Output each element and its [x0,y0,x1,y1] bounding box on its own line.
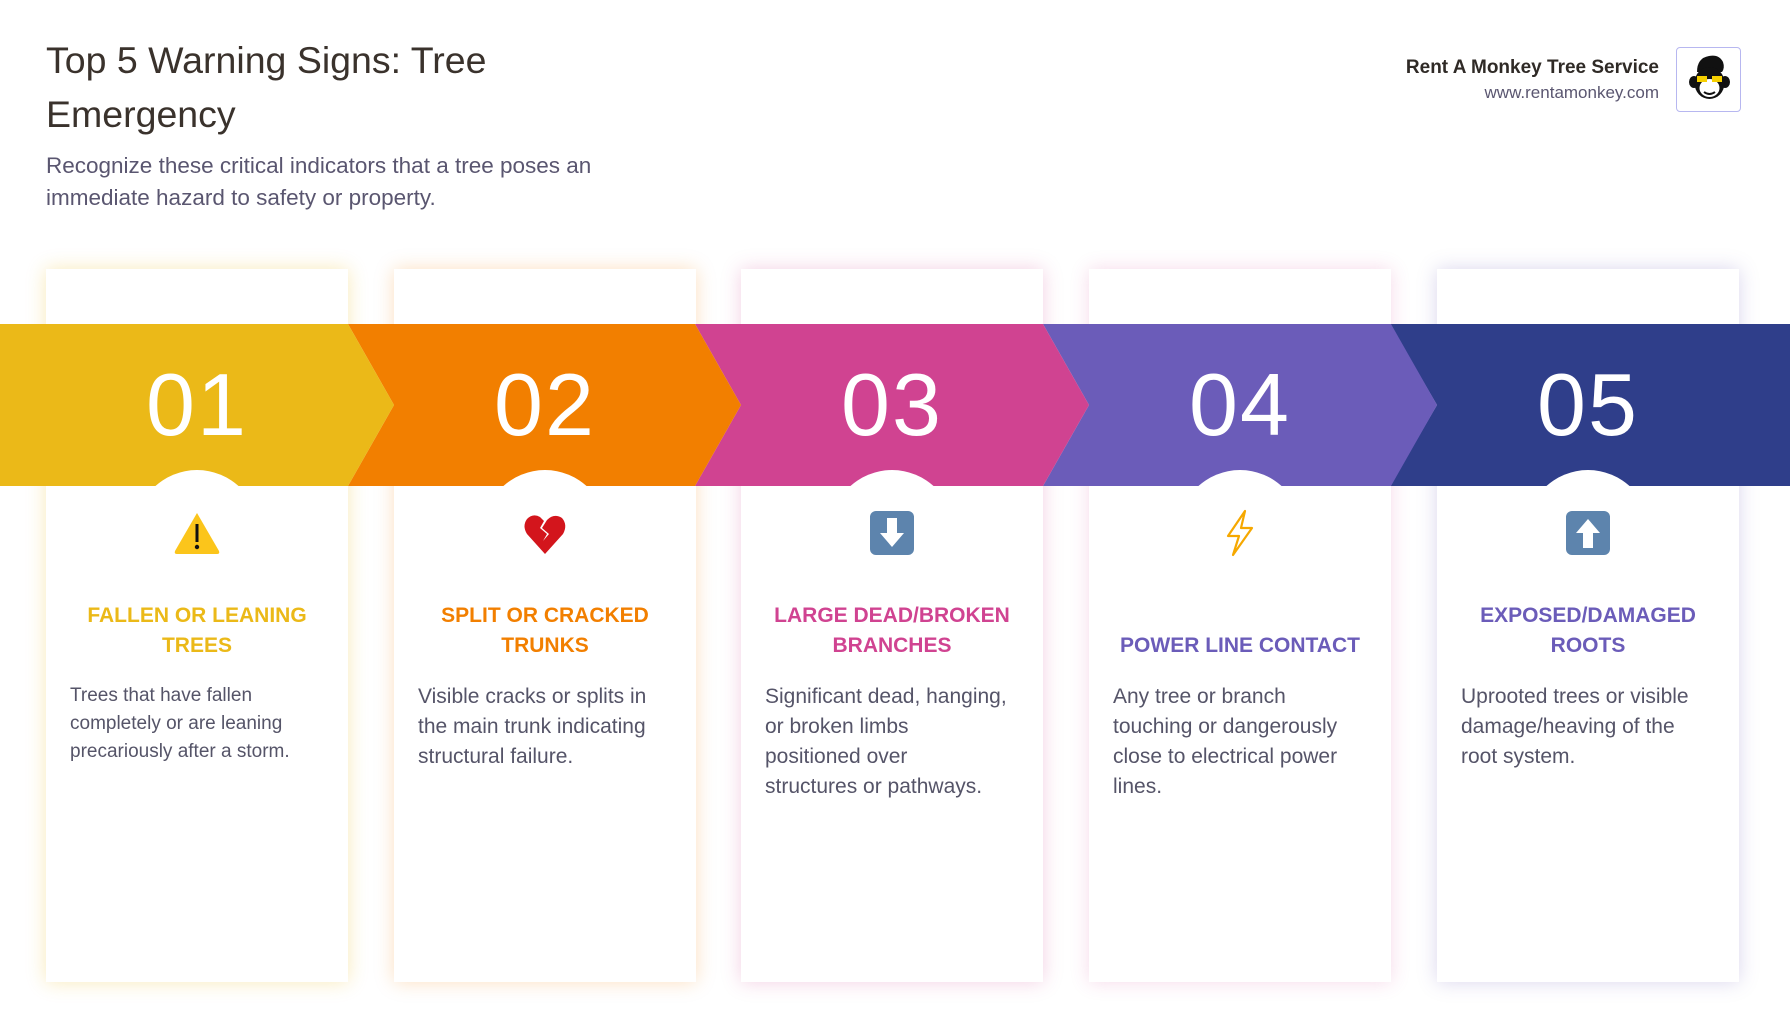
description 2: structural failure. [418,745,573,768]
description 5: Uprooted trees or visible [1461,685,1689,708]
description 2: Visible cracks or splits in [418,685,646,708]
number 04: 04 [1189,355,1291,454]
heading 2: SPLIT OR CRACKED [441,604,649,627]
title: Top 5 Warning Signs: Tree [46,39,486,81]
description 3: or broken limbs [765,715,909,738]
description 4 [1113,685,1337,798]
logo [1676,47,1741,112]
card 4 [1089,269,1391,982]
icon: up arrow [1566,511,1610,555]
title [46,39,486,135]
description 3 [765,685,1007,798]
icon: warning [174,513,220,554]
number 03: 03 [841,355,943,454]
description 2 [418,685,646,768]
heading 5 [1480,604,1696,657]
heading 3: LARGE DEAD/BROKEN [774,604,1010,627]
description 4: touching or dangerously [1113,715,1337,738]
description 1 [70,685,290,762]
description 1: Trees that have fallen [70,685,252,706]
heading 4: POWER LINE CONTACT [1120,634,1360,657]
description 3: structures or pathways. [765,775,982,798]
description 1: precariously after a storm. [70,741,290,762]
brand [1406,57,1659,102]
description 4: close to electrical power [1113,745,1337,768]
icon: down arrow [870,511,914,555]
number 02: 02 [494,355,596,454]
description 1: completely or are leaning [70,713,282,734]
description 5: root system. [1461,745,1575,768]
heading 3 [774,604,1010,657]
brand: www.rentamonkey.com [1485,83,1659,102]
description 5 [1461,685,1689,768]
number 01: 01 [146,355,248,454]
description 3: Significant dead, hanging, [765,685,1007,708]
subtitle: immediate hazard to safety or property. [46,185,436,210]
heading 2 [441,604,649,657]
description 2: the main trunk indicating [418,715,646,738]
heading 3: BRANCHES [832,634,952,657]
card 2 [394,269,696,982]
description 4: lines. [1113,775,1162,798]
icon: lightning [1226,510,1254,556]
heading 1: FALLEN OR LEANING TREES [87,604,307,657]
description 4: Any tree or branch [1113,685,1286,708]
heading 5: EXPOSED/DAMAGED [1480,604,1696,627]
brand: Rent A Monkey Tree Service [1406,57,1659,78]
heading 5: ROOTS [1551,634,1625,657]
subtitle [46,153,591,210]
heading 2: TRUNKS [501,634,589,657]
chevron band [0,324,1790,486]
card 1 [46,269,348,982]
icon: broken heart [524,515,566,554]
subtitle: Recognize these critical indicators that a tree poses an [46,153,591,178]
card 5 [1437,269,1739,982]
number 05: 05 [1537,355,1639,454]
description 3: positioned over [765,745,907,768]
description 5: damage/heaving of the [1461,715,1675,738]
title: Emergency [46,93,236,135]
card 3 [741,269,1043,982]
